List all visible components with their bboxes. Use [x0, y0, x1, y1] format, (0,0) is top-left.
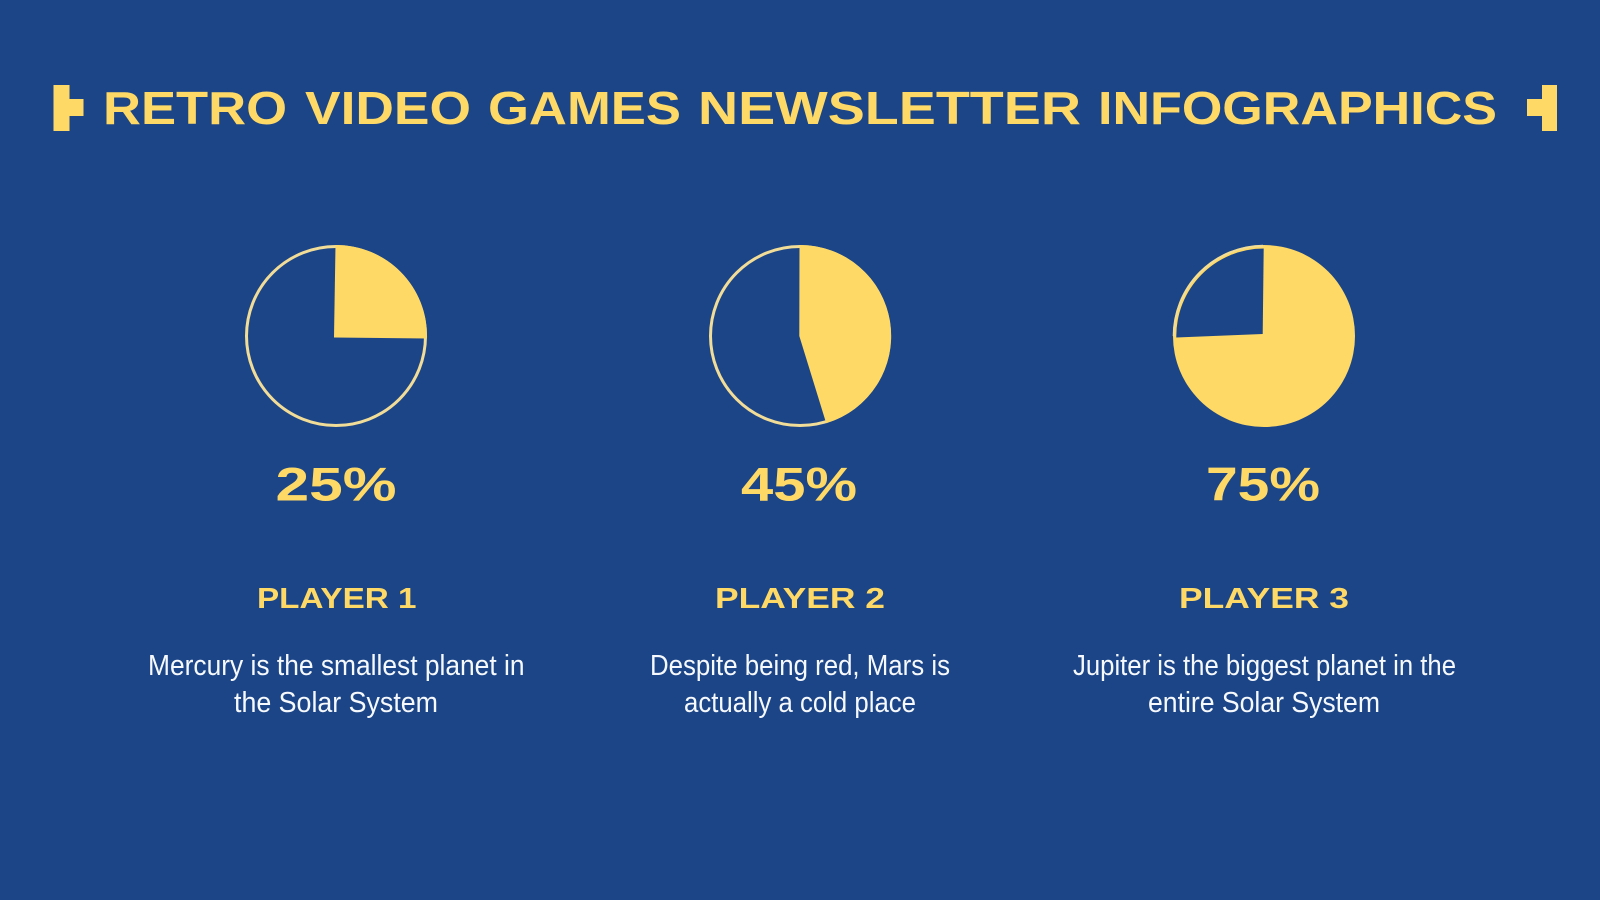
value: 25%: 25% — [276, 458, 396, 510]
panel: player 1 — [148, 245, 524, 719]
icon: left pixel bracket — [54, 85, 84, 131]
title text: GAMES — [488, 82, 681, 134]
description: player 2: Despite being red, Mars is — [650, 650, 950, 682]
heading: player 1: PLAYER 1 — [257, 583, 416, 615]
description: player 3: Jupiter is the biggest planet in the — [1073, 650, 1456, 682]
title text: VIDEO — [305, 82, 471, 134]
pie chart: 45% — [710, 245, 891, 426]
description: player 3 — [1073, 650, 1456, 719]
value: 75%: 75% — [1206, 458, 1320, 510]
title text: RETRO — [103, 82, 287, 134]
value: 45%: 45% — [741, 458, 857, 510]
pie chart: 75% — [1173, 245, 1355, 427]
title text — [103, 82, 1497, 134]
description: player 2 — [650, 650, 950, 719]
title text: NEWSLETTER — [698, 82, 1081, 134]
description: player 2: actually a cold place — [684, 687, 916, 719]
description: player 1: the Solar System — [234, 687, 438, 719]
heading: player 2: PLAYER 2 — [715, 583, 885, 615]
description: player 1: Mercury is the smallest planet in — [148, 650, 524, 682]
panel: player 2 — [650, 245, 950, 719]
icon: right pixel bracket — [1527, 85, 1557, 131]
title — [54, 82, 1557, 134]
description: player 1 — [148, 650, 524, 719]
title text: INFOGRAPHICS — [1098, 82, 1497, 134]
description: player 3: entire Solar System — [1148, 687, 1380, 719]
panel: player 3 — [1073, 245, 1456, 719]
heading: player 3: PLAYER 3 — [1179, 583, 1349, 615]
pie chart: 25% — [246, 245, 427, 426]
